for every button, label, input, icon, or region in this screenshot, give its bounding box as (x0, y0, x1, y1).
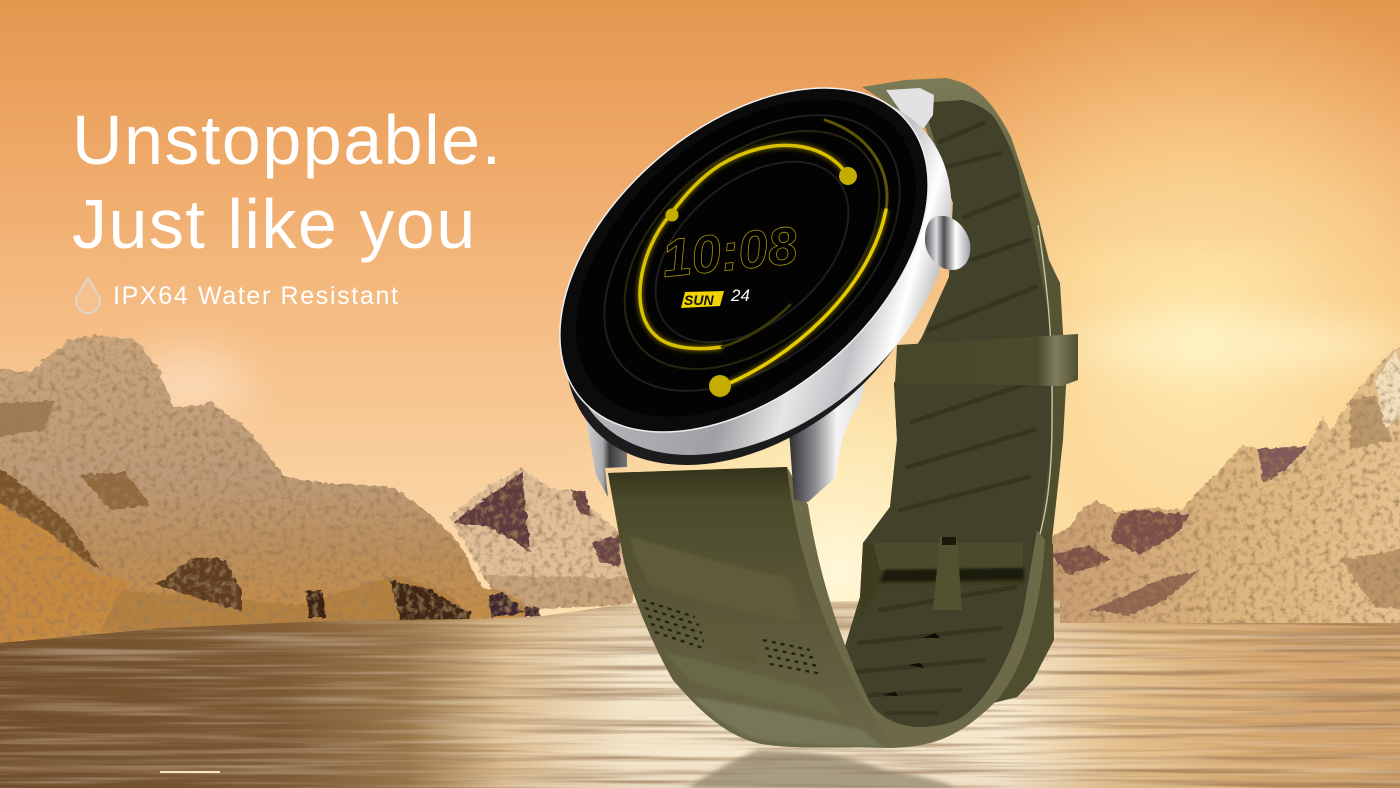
strap perforations left (642, 600, 704, 648)
left mountain range (0, 335, 543, 646)
dial date (681, 286, 750, 308)
heading: Just like you (72, 185, 477, 263)
icon: water drop (76, 278, 100, 313)
watch reflection (687, 750, 957, 788)
case underside (496, 39, 1008, 537)
yellow arc inner (640, 145, 848, 349)
strap lower pad (665, 653, 847, 717)
watch dial (495, 20, 993, 500)
dial time: 10:08 (659, 216, 801, 289)
back strap (843, 78, 1066, 730)
strap buckle (860, 537, 1024, 620)
dial date: 24 (730, 286, 750, 305)
dial date: SUN (684, 292, 714, 308)
heading (72, 101, 503, 263)
strap perforations right (763, 640, 822, 674)
yellow arc outer (720, 120, 887, 387)
yellow glow (640, 145, 886, 387)
heading: Unstoppable. (72, 101, 503, 179)
front strap (608, 467, 1045, 748)
water surface (0, 598, 1400, 788)
steel case (498, 20, 1022, 528)
subheading: water resistance: IPX64 Water Resistant (113, 282, 400, 310)
crown (925, 216, 970, 270)
strap middle pad (707, 620, 758, 663)
strap lowest pad (693, 697, 883, 747)
strap keeper loop (895, 334, 1078, 386)
right mountain range (1050, 340, 1400, 625)
center mountain (449, 468, 633, 610)
lugs (583, 88, 934, 502)
strap upper pad (630, 537, 800, 620)
watch (495, 20, 1078, 748)
